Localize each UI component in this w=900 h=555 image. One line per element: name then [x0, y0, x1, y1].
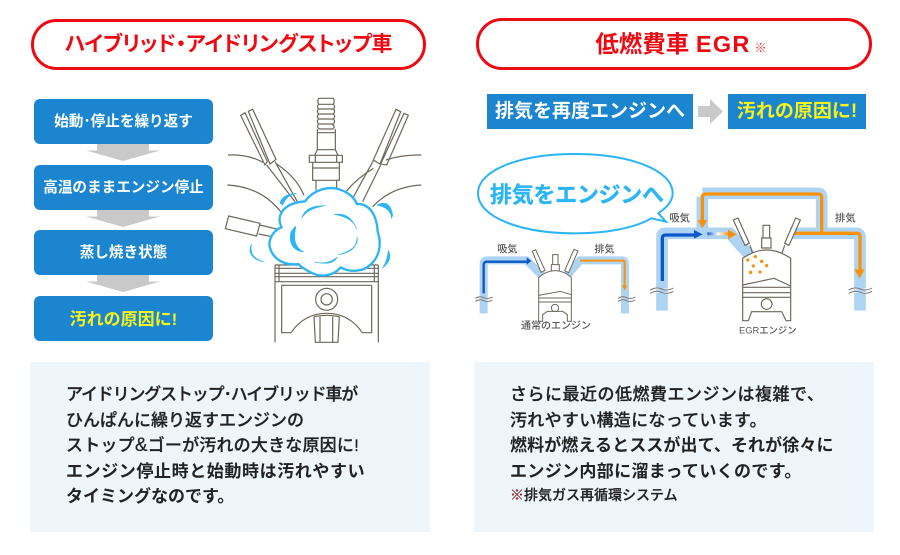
blue box: exhaust back to engine: 排気を再度エンジンへ: [495, 101, 685, 122]
illustration: EGR engine: [650, 188, 872, 335]
step: cause of dirt: 汚れの原因に!: [70, 310, 177, 329]
illustration: EGR engine: EGRエンジン: [739, 325, 797, 335]
arrow: step 3 to 4: [86, 274, 160, 292]
heading: hybrid and idling stop: [31, 19, 426, 70]
step: steamed state: [34, 230, 213, 275]
step: engine stop at high temp: 高温のままエンジン停止: [43, 180, 204, 196]
blue box: cause of dirt: [728, 94, 866, 129]
heading: low fuel EGR: 低燃費車 EGR ※: [595, 31, 767, 57]
illustration: normal engine: [475, 243, 636, 332]
step: repeat start and stop: [34, 99, 213, 144]
text panel: right: 燃料が燃えるとススが出て、それが徐々に: [510, 436, 834, 455]
small engine: [532, 249, 578, 321]
intake and exhaust ports: [227, 155, 421, 212]
right valve: [353, 109, 408, 202]
labels: 吸気: [669, 212, 690, 225]
flow: causes of dirt: [34, 99, 213, 341]
text panel: right: 汚れやすい構造になっています。: [510, 411, 767, 430]
labels: 吸気: [497, 243, 517, 256]
illustration: engine with cloud: [224, 98, 422, 343]
text panel: left: ストップ&ゴーが汚れの大きな原因に!: [66, 435, 359, 456]
speech bubble: 排気をエンジンへ: [490, 182, 664, 207]
spark plug: [309, 98, 342, 190]
soot dots: [746, 255, 768, 274]
speech bubble: [477, 153, 674, 234]
arrow: grey: [698, 99, 723, 124]
text panel: right: エンジン内部に溜まっていくのです。: [510, 462, 802, 481]
illustration: normal engine: 排気: [594, 243, 614, 256]
illustration: normal engine: 通常のエンジン: [521, 319, 591, 332]
blue box: cause of dirt: 汚れの原因に!: [737, 101, 857, 122]
arrow: step 2 to 3: [86, 209, 160, 227]
step: cause of dirt: [34, 296, 213, 341]
step: engine stop at high temp: [34, 165, 213, 210]
cloud: [250, 188, 393, 276]
heading: hybrid and idling stop: ハイブリッド・アイドリングストップ車: [65, 33, 392, 56]
step: steamed state: 蒸し焼き状態: [80, 245, 167, 261]
blue box: exhaust back to engine: [487, 94, 693, 129]
illustration: EGR engine: 排気: [835, 212, 856, 225]
engine: [733, 218, 800, 321]
step: repeat start and stop: 始動･停止を繰り返す: [54, 114, 193, 130]
text panel: right: さらに最近の低燃費エンジンは複雑で、: [510, 385, 824, 404]
text panel: left: タイミングなのです。: [66, 487, 234, 506]
text panel: right: [474, 362, 874, 532]
text panel: left: アイドリングストップ･ハイブリッド車が: [66, 385, 357, 404]
piston: [275, 265, 378, 342]
text panel: left: ひんぱんに繰り返すエンジンの: [66, 411, 304, 430]
left valve: [241, 109, 297, 202]
text panel: left: エンジン停止時と始動時は汚れやすい: [66, 462, 365, 481]
injector: [225, 216, 277, 237]
text panel: left: [30, 362, 430, 532]
text panel: right: ※排気ガス再循環システム: [510, 487, 678, 503]
ducts: [650, 193, 872, 311]
intake and exhaust ducts: [475, 257, 635, 313]
arrow: step 1 to 2: [86, 143, 160, 161]
heading: low fuel EGR: [476, 18, 872, 70]
